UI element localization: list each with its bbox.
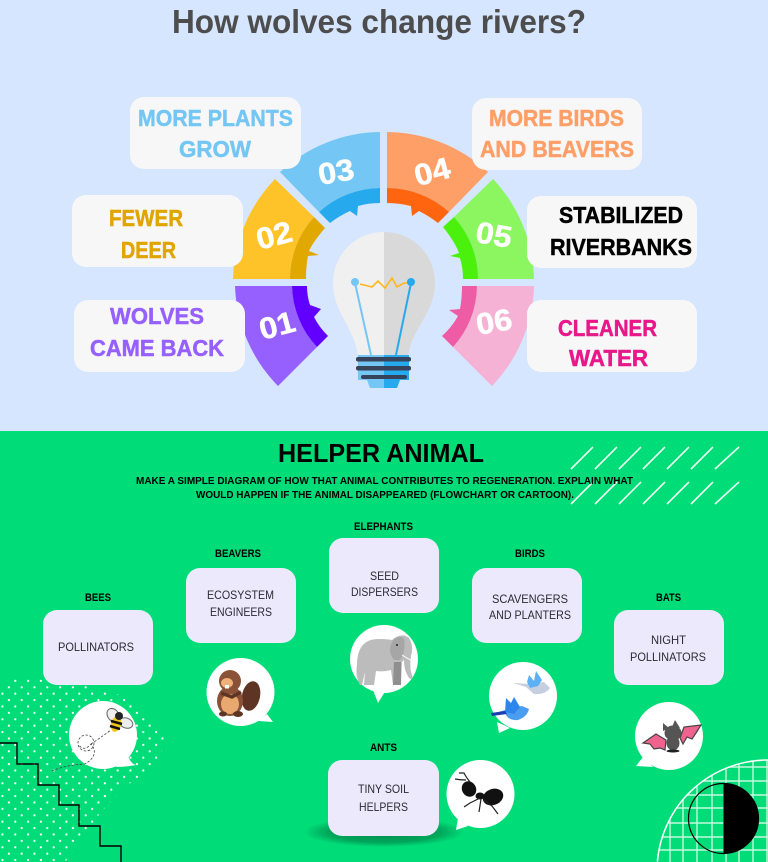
card: beavers [186,548,296,643]
card: bats: BATS [656,592,681,604]
callout: stabilized riverbanks: STABILIZED [559,202,683,228]
callout: more plants grow: GROW [179,136,251,162]
card: elephants: DISPERSERS [351,585,418,599]
card: birds: AND PLANTERS [489,608,571,622]
card: birds: BIRDS [515,548,545,560]
card: beavers: ECOSYSTEM [207,588,274,602]
callout: more birds and beavers: AND BEAVERS [480,136,634,162]
segment 03 [280,132,380,223]
segment 06: 06 [474,303,515,342]
segment 01 [235,286,328,386]
card: elephants: ELEPHANTS [354,521,413,533]
segment 04 [387,132,488,223]
segment 01: 01 [256,306,299,347]
card: beavers: ENGINEERS [210,605,272,619]
icon: ant bubble [446,760,514,830]
instructions text: WOULD HAPPEN IF THE ANIMAL DISAPPEARED (FLOWCHART OR CARTOON). [196,489,574,501]
callout: fewer deer: FEWER [109,205,183,231]
callout: cleaner water [527,300,697,372]
top panel background [0,0,768,431]
card: bats [614,592,724,685]
card: beavers: BEAVERS [215,548,261,560]
callout: cleaner water: CLEANER [558,315,657,341]
callout: more plants grow [130,97,301,169]
card: birds [472,548,582,643]
icon: light bulb [333,232,435,388]
callout: more birds and beavers [472,98,642,170]
callout: more plants grow: MORE PLANTS [138,105,293,131]
segment 03: 03 [316,153,357,192]
card: bees: POLLINATORS [58,640,134,654]
callout: fewer deer: DEER [121,237,176,263]
callout: wolves came back: WOLVES [110,303,204,329]
icon: bat bubble [635,702,703,770]
instructions text [136,475,634,501]
segment 05 [443,179,534,279]
segment 06 [442,286,534,386]
title: How wolves change rivers? [172,3,586,40]
callout: more birds and beavers: MORE BIRDS [489,105,624,131]
callout: cleaner water: WATER [569,345,648,371]
card: ants: HELPERS [359,800,408,814]
segment 02: 02 [253,216,296,257]
card: bats: POLLINATORS [630,650,706,664]
card: bats: NIGHT [651,633,687,647]
icon: bee bubble [52,701,137,771]
heading: helper animal: HELPER ANIMAL [278,438,484,468]
card: ants: TINY SOIL [358,782,409,796]
slanted white lines [571,447,739,504]
card: elephants [329,521,439,613]
icon: birds bubble [489,662,557,733]
icon: beaver bubble [206,658,274,726]
icon: elephant bubble [350,625,418,703]
callout: stabilized riverbanks [527,196,697,268]
callout: fewer deer [72,195,243,267]
segment 05: 05 [473,216,514,255]
dotted background shape [0,678,167,862]
callout: wolves came back [74,300,245,372]
segment 04: 04 [411,152,454,193]
card: birds: SCAVENGERS [492,592,568,606]
callout: wolves came back: CAME BACK [90,335,224,361]
card: bees [43,592,153,685]
instructions text: MAKE A SIMPLE DIAGRAM OF HOW THAT ANIMAL CONTRIBUTES TO REGENERATION. EXPLAIN WHAT [136,475,634,487]
card: ants [304,742,464,847]
bottom panel background [0,431,768,862]
callout: stabilized riverbanks: RIVERBANKS [550,234,692,260]
wheel diagram [233,132,534,386]
segment 02 [233,179,325,279]
card: bees: BEES [85,592,111,604]
card: elephants: SEED [370,569,399,583]
grid circle with half-moon [657,760,768,862]
stair line [0,743,121,862]
card: ants: ANTS [370,742,397,754]
